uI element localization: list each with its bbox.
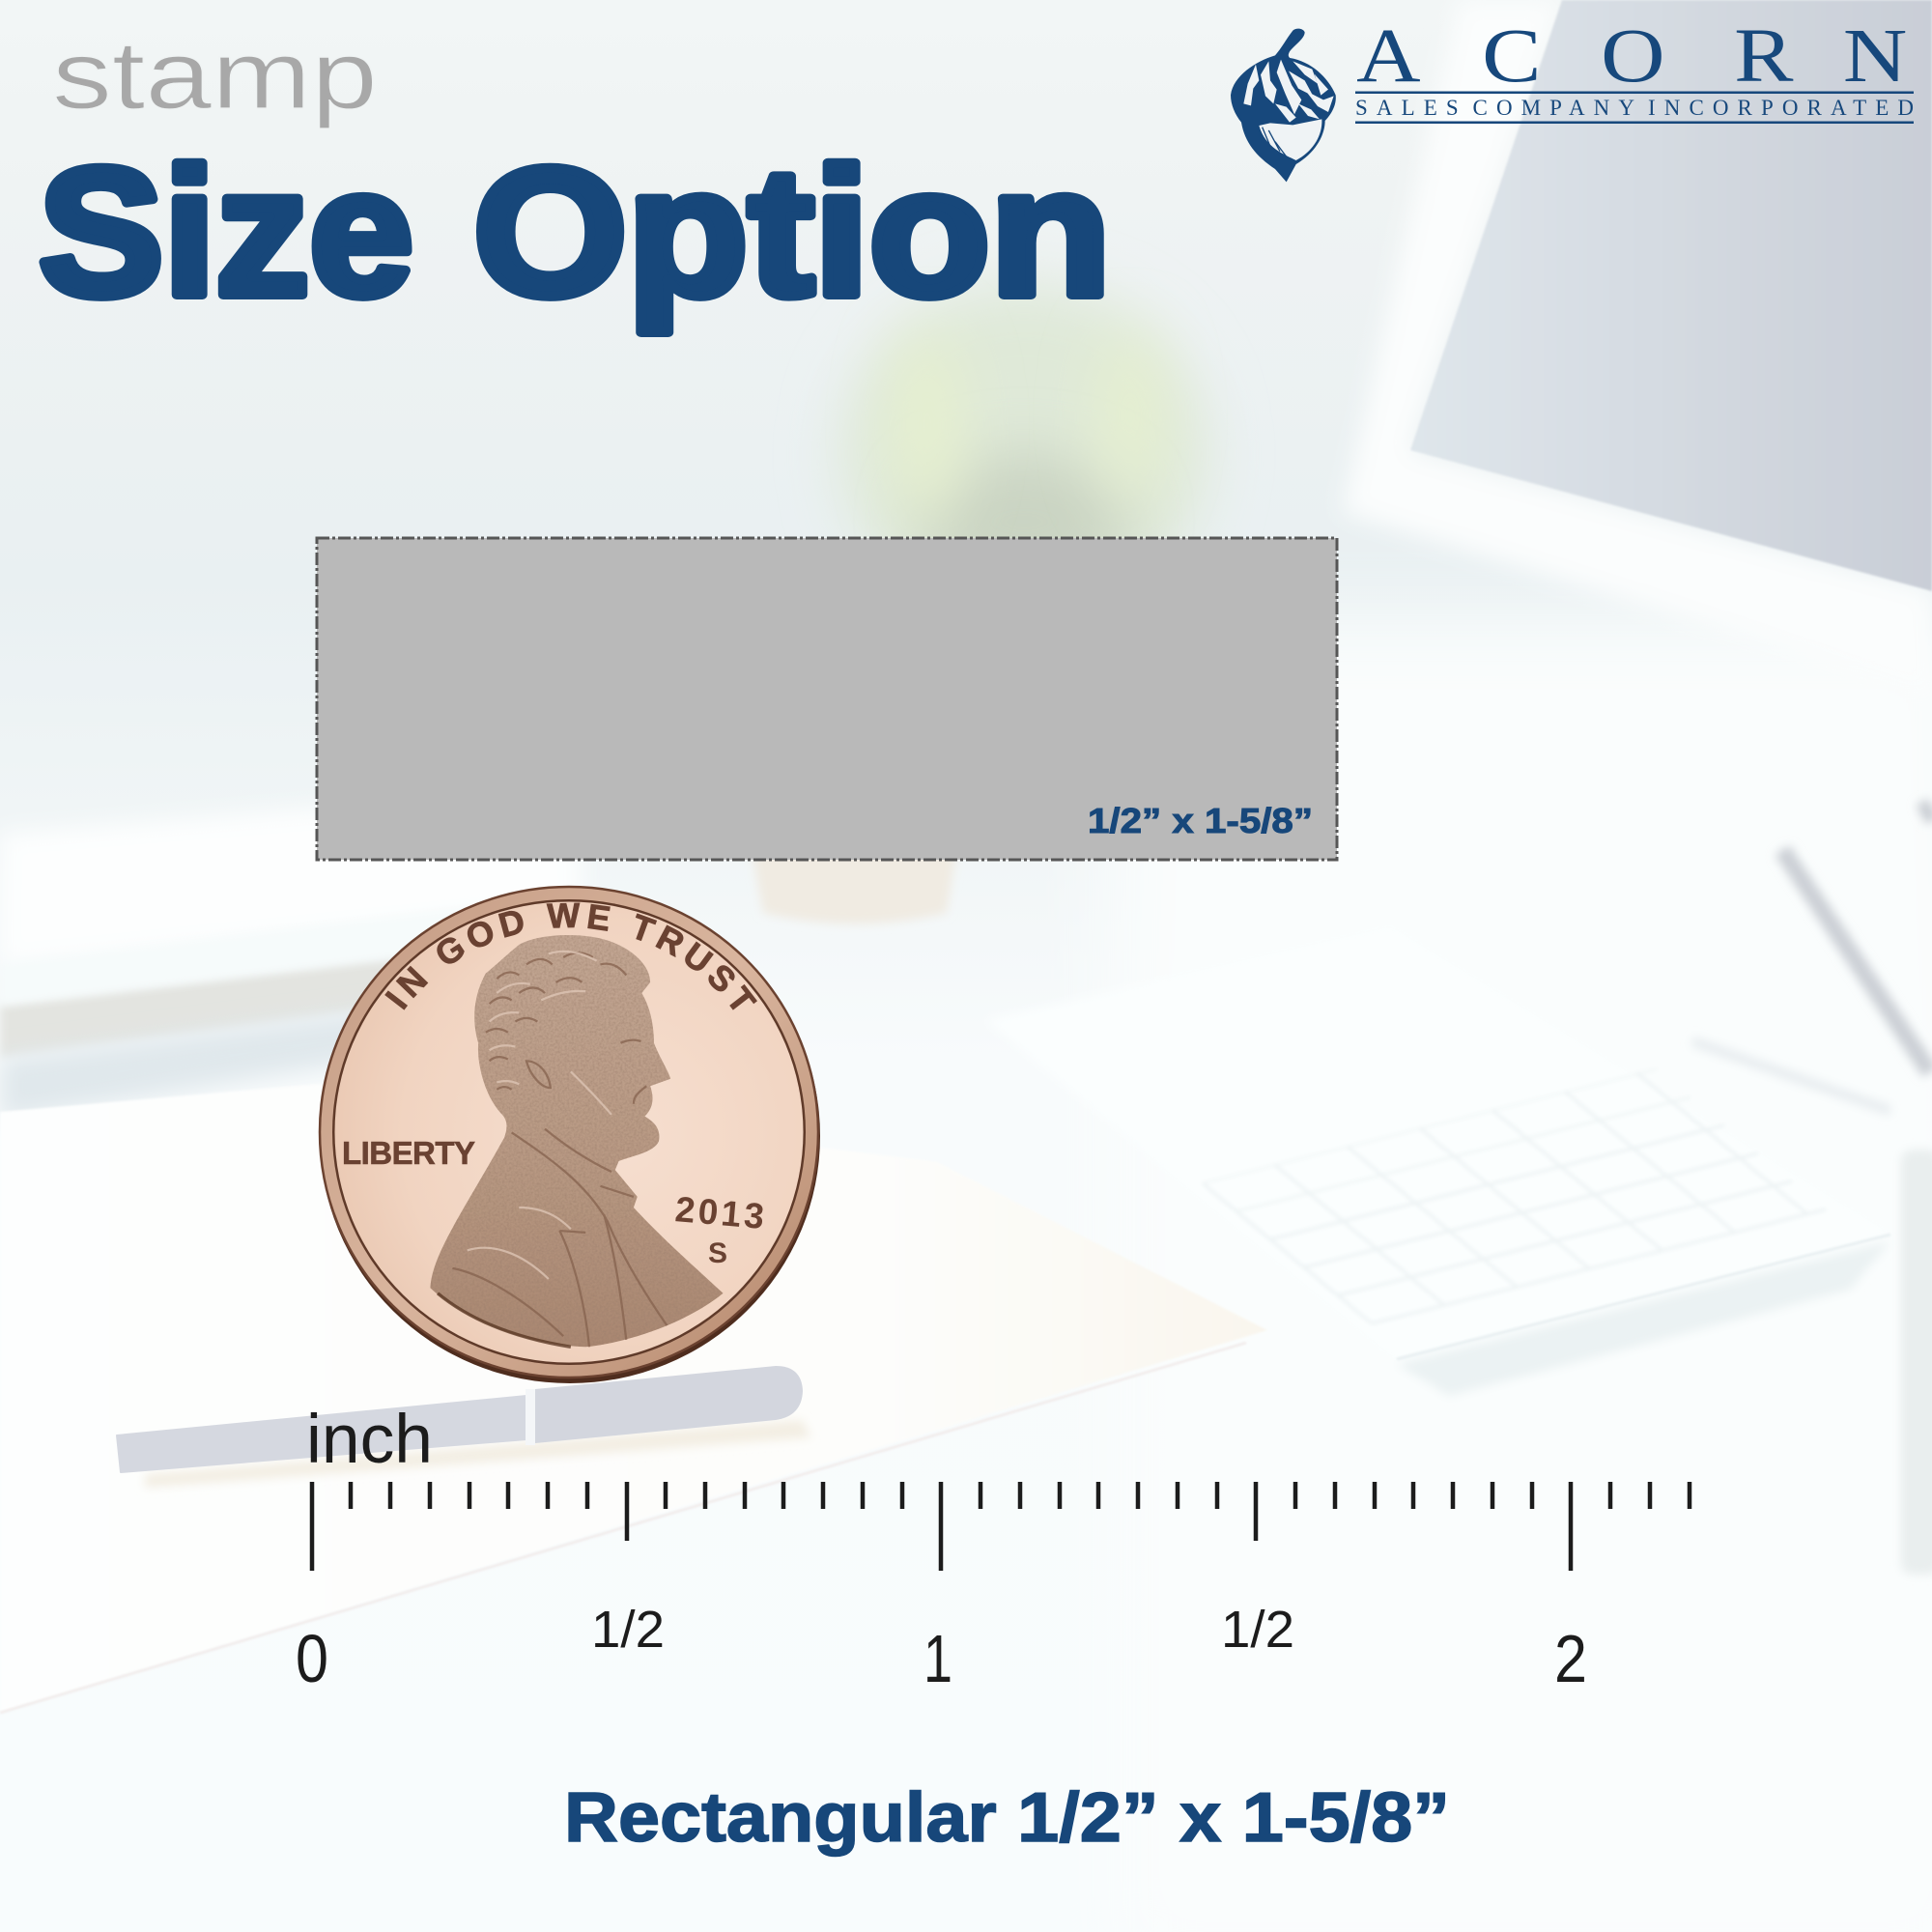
logo rule bottom [1355, 122, 1914, 124]
icon: acorn [1231, 29, 1336, 182]
logo: Acorn Sales Company Incorporated [1231, 13, 1914, 182]
title: Size Option: Size [39, 130, 413, 333]
scale numbers: 2 [1554, 1621, 1587, 1696]
ruler [296, 1402, 1690, 1696]
window sill [0, 787, 580, 1121]
coin face [334, 902, 804, 1362]
year: 2013 [673, 1189, 766, 1236]
minor ticks [351, 1482, 1690, 1509]
Lincoln portrait [430, 935, 724, 1347]
scale numbers: 1 [923, 1621, 952, 1696]
pencils and cup [1692, 802, 1932, 1575]
wordmark: ACORN: ACORN [1356, 13, 1907, 99]
title: Size Option: Option [473, 130, 1111, 333]
wordmark: Sales Company Incorporated: SALES COMPANY INCORPORATED [1355, 96, 1914, 120]
motto: IN GOD WE TRUST [384, 902, 757, 1010]
Liberty: LIBERTY [342, 1135, 475, 1171]
title: Size Option [39, 130, 1111, 333]
plant [840, 285, 1208, 623]
unit label: inch [306, 1402, 433, 1478]
coin rim [320, 887, 818, 1378]
plant pot [752, 850, 956, 923]
size label: 1/2” x 1-5/8” [1088, 801, 1313, 840]
scale numbers: 1/2 [591, 1601, 665, 1659]
stamp size rectangle [317, 538, 1337, 860]
logo rule top [1355, 91, 1914, 94]
penny coin [319, 885, 820, 1383]
coin edge [320, 889, 820, 1383]
paper sheet [0, 1084, 1267, 1713]
monitor [1343, 0, 1932, 696]
right side white wash [1111, 618, 1932, 1932]
label: stamp: stamp [52, 21, 378, 129]
major ticks [312, 1482, 1571, 1571]
mint mark: S [708, 1237, 727, 1269]
scale numbers: 0 [296, 1621, 328, 1696]
scale numbers: 1/2 [1221, 1601, 1294, 1659]
caption: Rectangular 1/2” x 1-5/8” [564, 1779, 1450, 1857]
pen [117, 1366, 811, 1488]
keyboard [985, 927, 1890, 1396]
scale numbers [296, 1601, 1587, 1696]
